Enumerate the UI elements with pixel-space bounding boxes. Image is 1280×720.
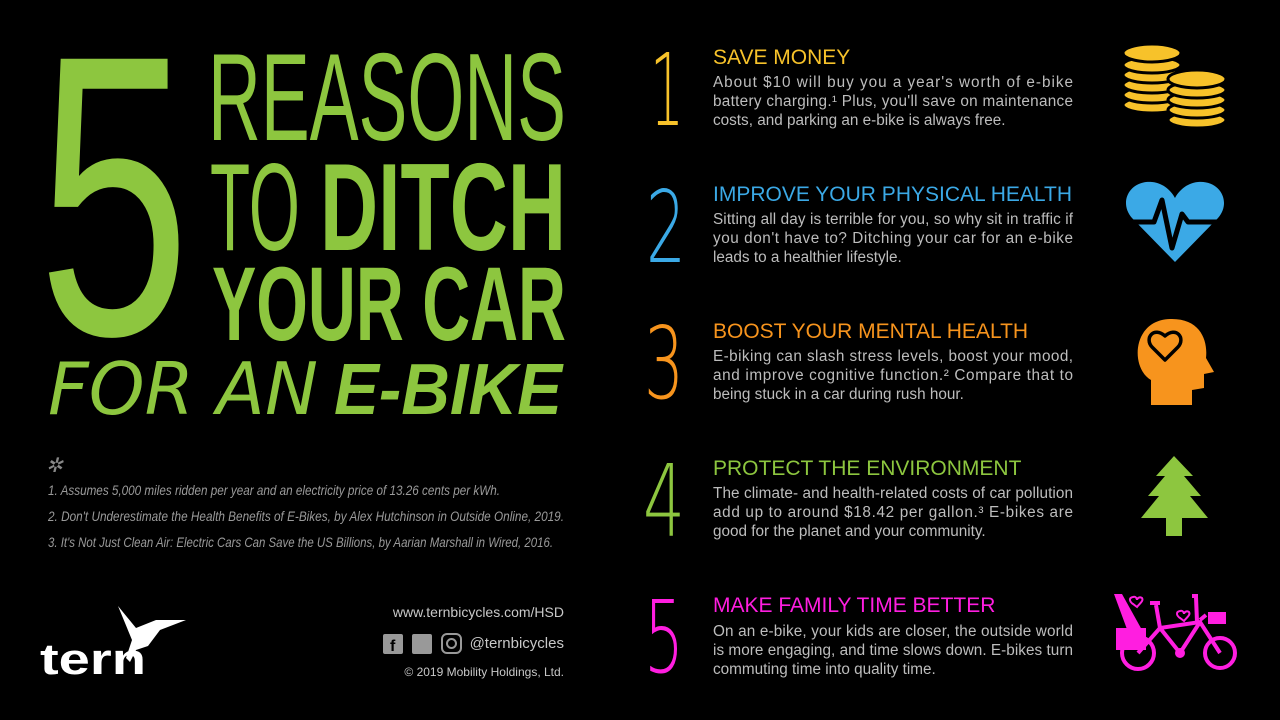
reason 2: physical health: leads to a healthier lifestyle. xyxy=(713,249,902,266)
reason 3: mental health: BOOST YOUR MENTAL HEALTH xyxy=(713,320,1028,343)
reason 4: environment: good for the planet and your community. xyxy=(713,523,986,540)
title: REASONS: REASONS xyxy=(208,29,566,167)
reason 2: physical health: you don't have to? Ditching your car for an e-bike xyxy=(713,230,1073,247)
footnotes xyxy=(46,455,564,550)
reason 2: physical health: IMPROVE YOUR PHYSICAL HEALTH xyxy=(713,183,1072,206)
title: TO DITCH: DITCH xyxy=(320,139,566,277)
reason 4: environment: 4 xyxy=(643,443,685,560)
footer links xyxy=(383,604,564,679)
reason 4: environment: PROTECT THE ENVIRONMENT xyxy=(713,457,1022,480)
reason 5: family time: MAKE FAMILY TIME BETTER xyxy=(713,594,995,617)
reason 4: environment xyxy=(643,443,1208,560)
logo: tern xyxy=(40,606,186,684)
reason 4: environment: The climate- and health-related costs of car pollution xyxy=(713,485,1073,502)
footer links: @ternbicycles xyxy=(470,635,564,652)
reason 4: environment: add up to around $18.42 per gallon.³ E-bikes are xyxy=(713,504,1073,521)
reason 5: family time: commuting time into quality time. xyxy=(713,661,936,678)
footnote 2: 2. Don't Underestimate the Health Benefits of E-Bikes, by Alex Hutchinson in Outside Online, 2019. xyxy=(47,508,564,524)
icon: cargo bike xyxy=(1122,596,1235,669)
icons: social xyxy=(383,634,461,654)
icon: origami bird xyxy=(118,606,186,662)
title: TO DITCH: TO xyxy=(210,139,300,277)
icon: asterisk: ✲ xyxy=(46,455,64,477)
reason 3: mental health: E-biking can slash stress levels, boost your mood, xyxy=(713,348,1073,365)
icon: coins xyxy=(1123,44,1226,128)
reason 2: physical health: Sitting all day is terrible for you, so why sit in traffic if xyxy=(713,211,1074,228)
reason 3: mental health: and improve cognitive function.² Compare that to xyxy=(713,367,1073,384)
icon: tree xyxy=(1141,456,1208,536)
reason 1: save money: 1 xyxy=(650,32,684,149)
reason 3: mental health xyxy=(644,305,1214,422)
footer links: © 2019 Mobility Holdings, Ltd. xyxy=(404,665,564,679)
reason 2: physical health: 2 xyxy=(646,169,686,286)
icon: heart with pulse xyxy=(1126,182,1224,262)
title: FOR AN E-BIKE: FOR AN xyxy=(48,347,318,431)
reason 1: save money xyxy=(650,32,1226,149)
reason 2: physical health xyxy=(646,169,1224,286)
reason 1: save money: SAVE MONEY xyxy=(713,46,850,69)
reason 1: save money: About $10 will buy you a year's worth of e-bike xyxy=(713,74,1073,91)
logo: tern: tern xyxy=(40,635,146,684)
reason 5: family time: 5 xyxy=(644,579,684,696)
icon: head with heart xyxy=(1138,319,1214,405)
title xyxy=(38,0,566,431)
footnote 1: 1. Assumes 5,000 miles ridden per year and an electricity price of 13.26 cents per kWh. xyxy=(48,482,500,498)
title: TO DITCH xyxy=(210,139,566,277)
footer links: f xyxy=(390,638,396,655)
reason 1: save money: costs, and parking an e-bike is always free. xyxy=(713,112,1006,129)
reason 3: mental health: being stuck in a car during rush hour. xyxy=(713,386,964,403)
title: FOR AN E-BIKE: E-BIKE xyxy=(334,350,564,430)
footer links: www.ternbicycles.com/HSD xyxy=(392,604,564,620)
reason 5: family time: is more engaging, and time slows down. E-bikes turn xyxy=(713,642,1073,659)
title: YOUR CAR: YOUR CAR xyxy=(212,246,566,363)
footnote 3: 3. It's Not Just Clean Air: Electric Cars Can Save the US Billions, by Aarian Marshall in Wired, 2016. xyxy=(48,534,553,550)
title: FOR AN E-BIKE xyxy=(48,347,564,431)
reason 5: family time: On an e-bike, your kids are closer, the outside world xyxy=(713,623,1073,640)
reason 5: family time xyxy=(644,579,1235,696)
reason 1: save money: battery charging.¹ Plus, you'll save on maintenance xyxy=(713,93,1073,110)
reason 3: mental health: 3 xyxy=(644,305,684,422)
